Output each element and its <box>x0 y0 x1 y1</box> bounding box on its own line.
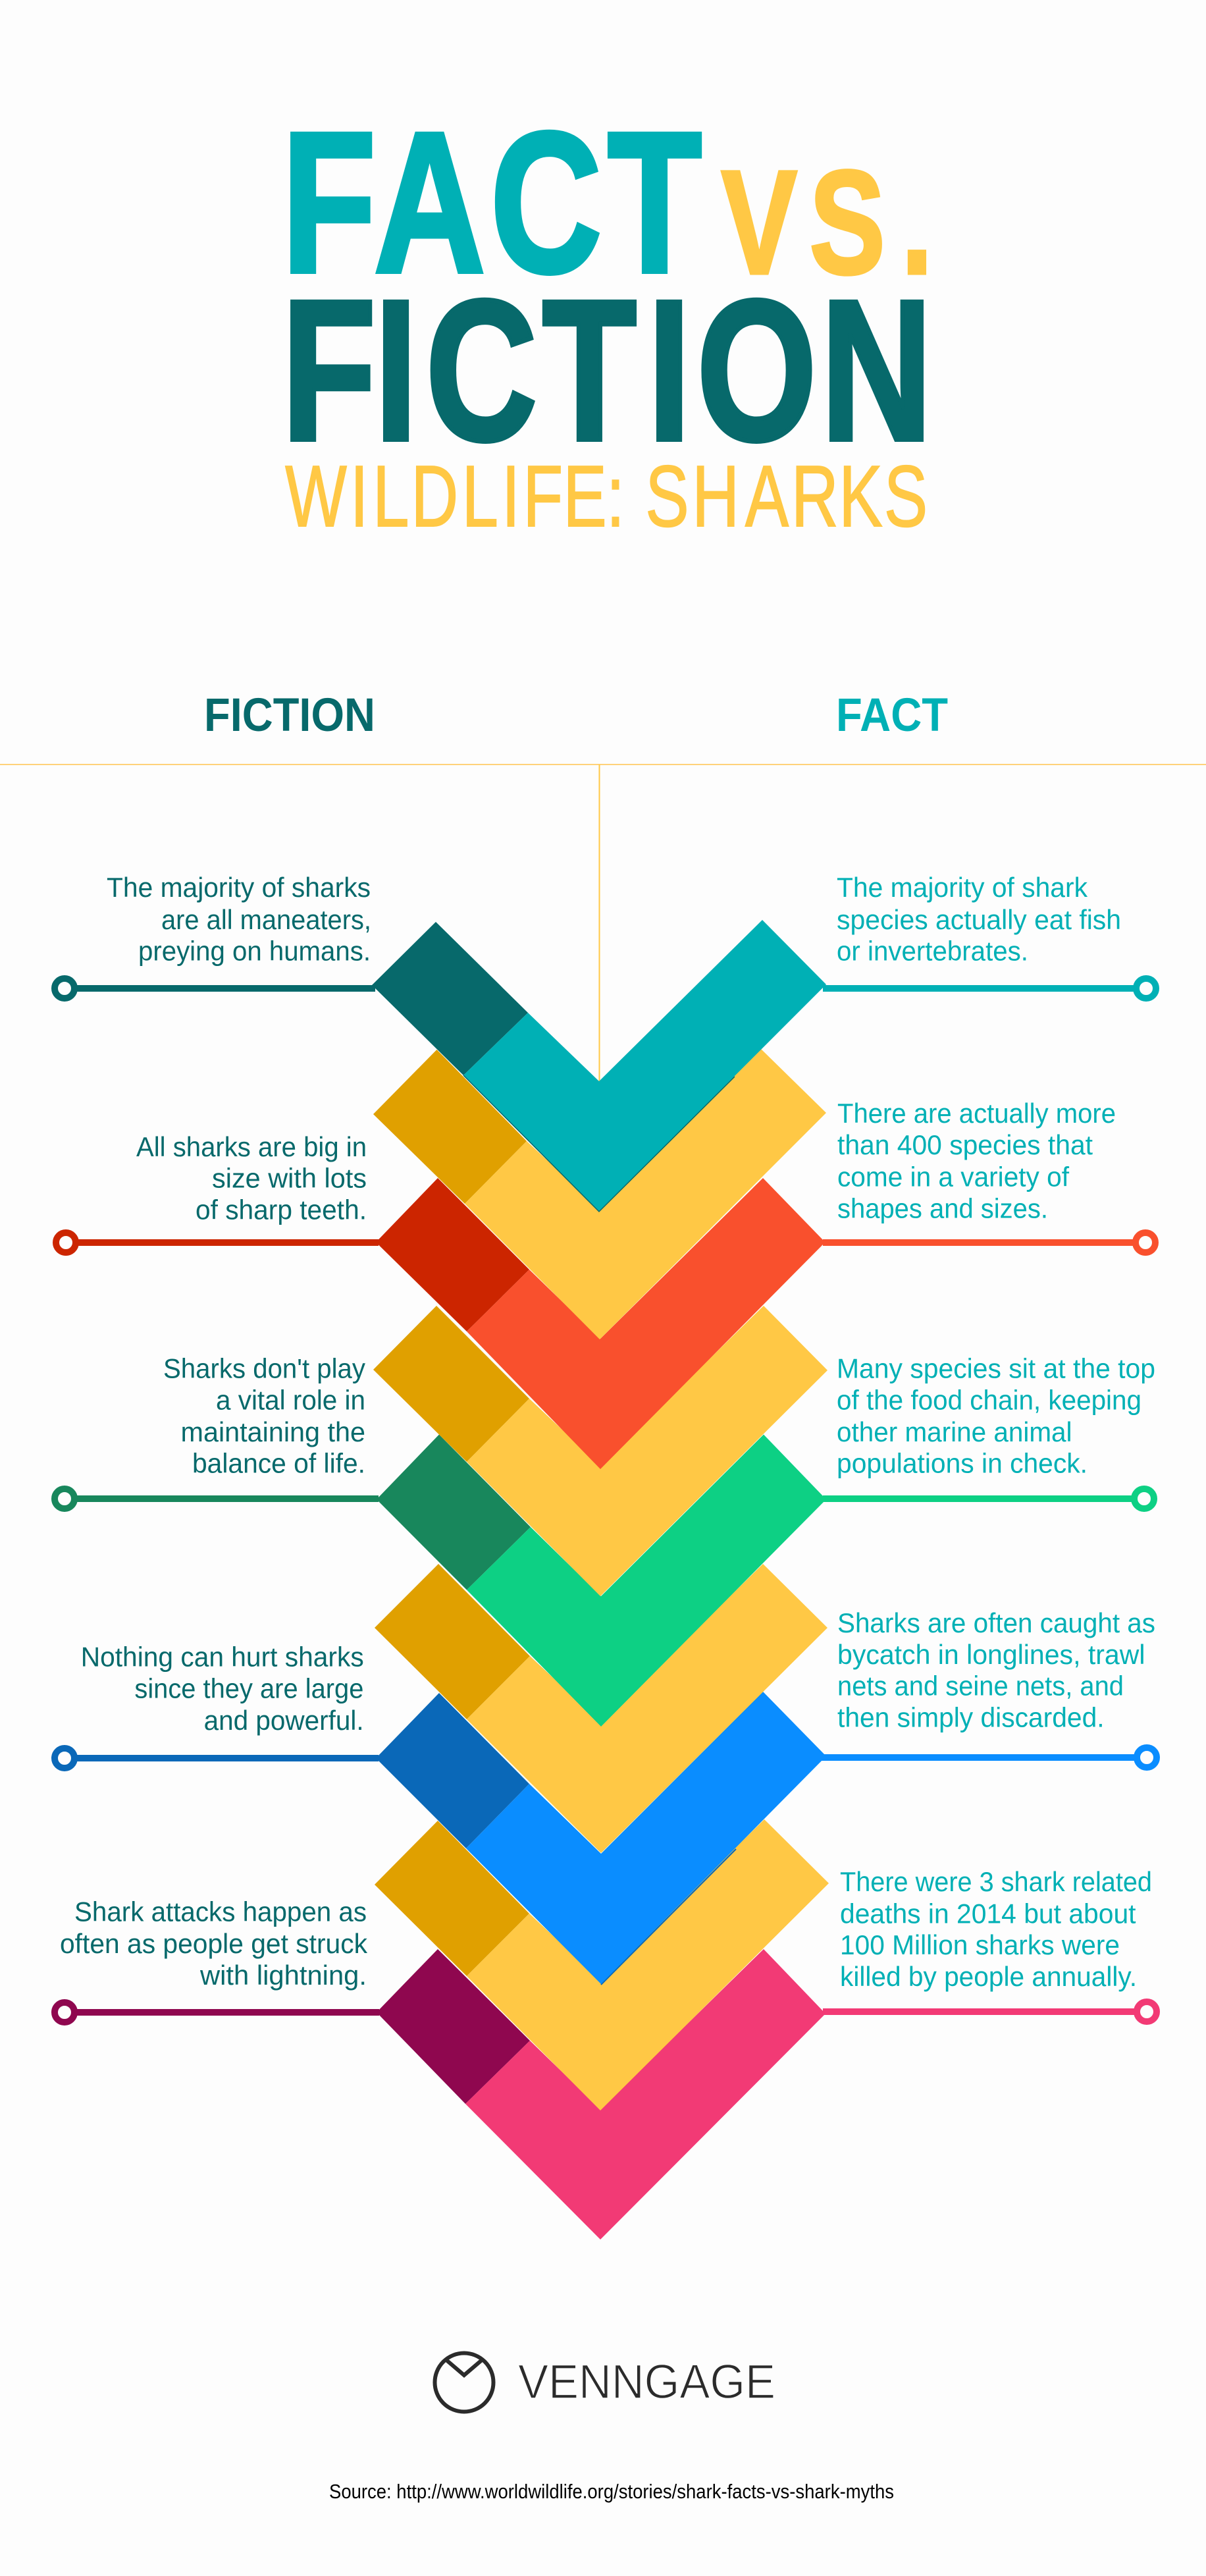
row 4 fact text: then simply discarded. <box>837 1702 1105 1732</box>
title word: FACT: FACT <box>282 91 702 314</box>
subtitle: WILDLIFE: SHARKS <box>285 447 928 545</box>
chevron: blue <box>376 1692 826 1985</box>
row 5 fact text: 100 Million sharks were <box>840 1929 1120 1960</box>
row 5 fact text: killed by people annually. <box>840 1961 1137 1992</box>
row 1 fiction text <box>107 872 371 967</box>
row 5 fact text <box>840 1866 1152 1992</box>
row 2 fact text: come in a variety of <box>837 1162 1069 1193</box>
row 1 fact text: The majority of shark <box>837 872 1088 903</box>
row 1 fiction text: preying on humans. <box>138 935 371 967</box>
logo <box>434 2353 775 2411</box>
row 3 fiction text: Sharks don't play <box>163 1353 365 1384</box>
row 2 fiction text: of sharp teeth. <box>196 1194 367 1225</box>
connector: row 3 fiction <box>55 1489 379 1509</box>
row 3 fiction text <box>163 1353 365 1479</box>
row 4 fact text: nets and seine nets, and <box>837 1671 1124 1702</box>
connector: row 4 fact <box>822 1748 1157 1767</box>
chevron: yellow 1 <box>373 1049 826 1339</box>
connector: row 5 fiction <box>55 2002 379 2022</box>
row 2 fiction text: size with lots <box>212 1163 367 1194</box>
source line: Source: http://www.worldwildlife.org/stories/shark-facts-vs-shark-myths <box>329 2480 894 2503</box>
row 4 fiction text <box>81 1642 364 1736</box>
title word: FICTION: FICTION <box>282 259 932 482</box>
row 5 fact text: deaths in 2014 but about <box>840 1898 1136 1929</box>
row 4 fiction text: and powerful. <box>204 1705 364 1736</box>
chevron: yellow 4 <box>375 1819 829 2110</box>
chevron: red <box>376 1178 826 1469</box>
row 5 fiction text: Shark attacks happen as <box>74 1896 367 1927</box>
stacked chevrons <box>372 920 829 2240</box>
row 1 fact text: species actually eat fish <box>837 904 1121 935</box>
row 3 fact text: populations in check. <box>837 1448 1088 1479</box>
chevron: yellow 2 <box>373 1306 827 1596</box>
row 5 fiction text: with lightning. <box>199 1960 367 1991</box>
row 1 fact text: or invertebrates. <box>837 935 1028 967</box>
chevron: teal <box>372 920 826 1212</box>
column heading: fact: FACT <box>836 689 948 741</box>
row 1 fact text <box>837 872 1121 967</box>
row 3 fiction text: a vital role in <box>216 1384 365 1415</box>
row 3 fact text <box>837 1353 1155 1479</box>
connector: row 4 fiction <box>55 1748 379 1768</box>
row 4 fact text: Sharks are often caught as <box>837 1607 1155 1638</box>
row 3 fiction text: maintaining the <box>180 1416 365 1447</box>
chevron: pink <box>377 1949 826 2240</box>
row 2 fiction text <box>136 1131 367 1225</box>
connector: row 3 fact <box>823 1489 1154 1509</box>
row 5 fiction text <box>60 1896 368 1991</box>
row 5 fact text: There were 3 shark related <box>840 1866 1152 1897</box>
connector: row 2 fact <box>823 1233 1155 1252</box>
column heading: fiction: FICTION <box>204 689 375 741</box>
row 2 fact text <box>837 1098 1116 1223</box>
logo wordmark: VENNGAGE <box>518 2355 775 2409</box>
row 3 fact text: Many species sit at the top <box>837 1353 1155 1384</box>
row 2 fact text: shapes and sizes. <box>837 1193 1048 1223</box>
connector: row 5 fact <box>823 2002 1157 2022</box>
connector: row 1 fiction <box>55 979 375 998</box>
row 2 fiction text: All sharks are big in <box>136 1131 367 1162</box>
icon: venngage clock mark <box>434 2353 494 2411</box>
title word: VS.: VS. <box>721 140 933 305</box>
row 4 fact text: bycatch in longlines, trawl <box>837 1639 1145 1670</box>
row 4 fact text <box>837 1607 1155 1732</box>
chevron: green <box>377 1434 826 1727</box>
row 1 fiction text: are all maneaters, <box>161 904 371 935</box>
row 2 fact text: There are actually more <box>837 1098 1116 1129</box>
row 3 fiction text: balance of life. <box>192 1448 365 1479</box>
row 2 fact text: than 400 species that <box>837 1129 1093 1160</box>
row 3 fact text: of the food chain, keeping <box>837 1384 1141 1415</box>
row 5 fiction text: often as people get struck <box>60 1928 368 1959</box>
row 1 fiction text: The majority of sharks <box>107 872 371 903</box>
row 4 fiction text: since they are large <box>134 1673 363 1704</box>
chevron: yellow 3 <box>375 1564 827 1853</box>
connector lines and end circles <box>55 979 1157 2022</box>
row 4 fiction text: Nothing can hurt sharks <box>81 1642 364 1673</box>
title <box>282 91 933 545</box>
connector: row 1 fact <box>823 979 1156 998</box>
row 3 fact text: other marine animal <box>837 1416 1072 1447</box>
connector: row 2 fiction <box>56 1233 379 1252</box>
